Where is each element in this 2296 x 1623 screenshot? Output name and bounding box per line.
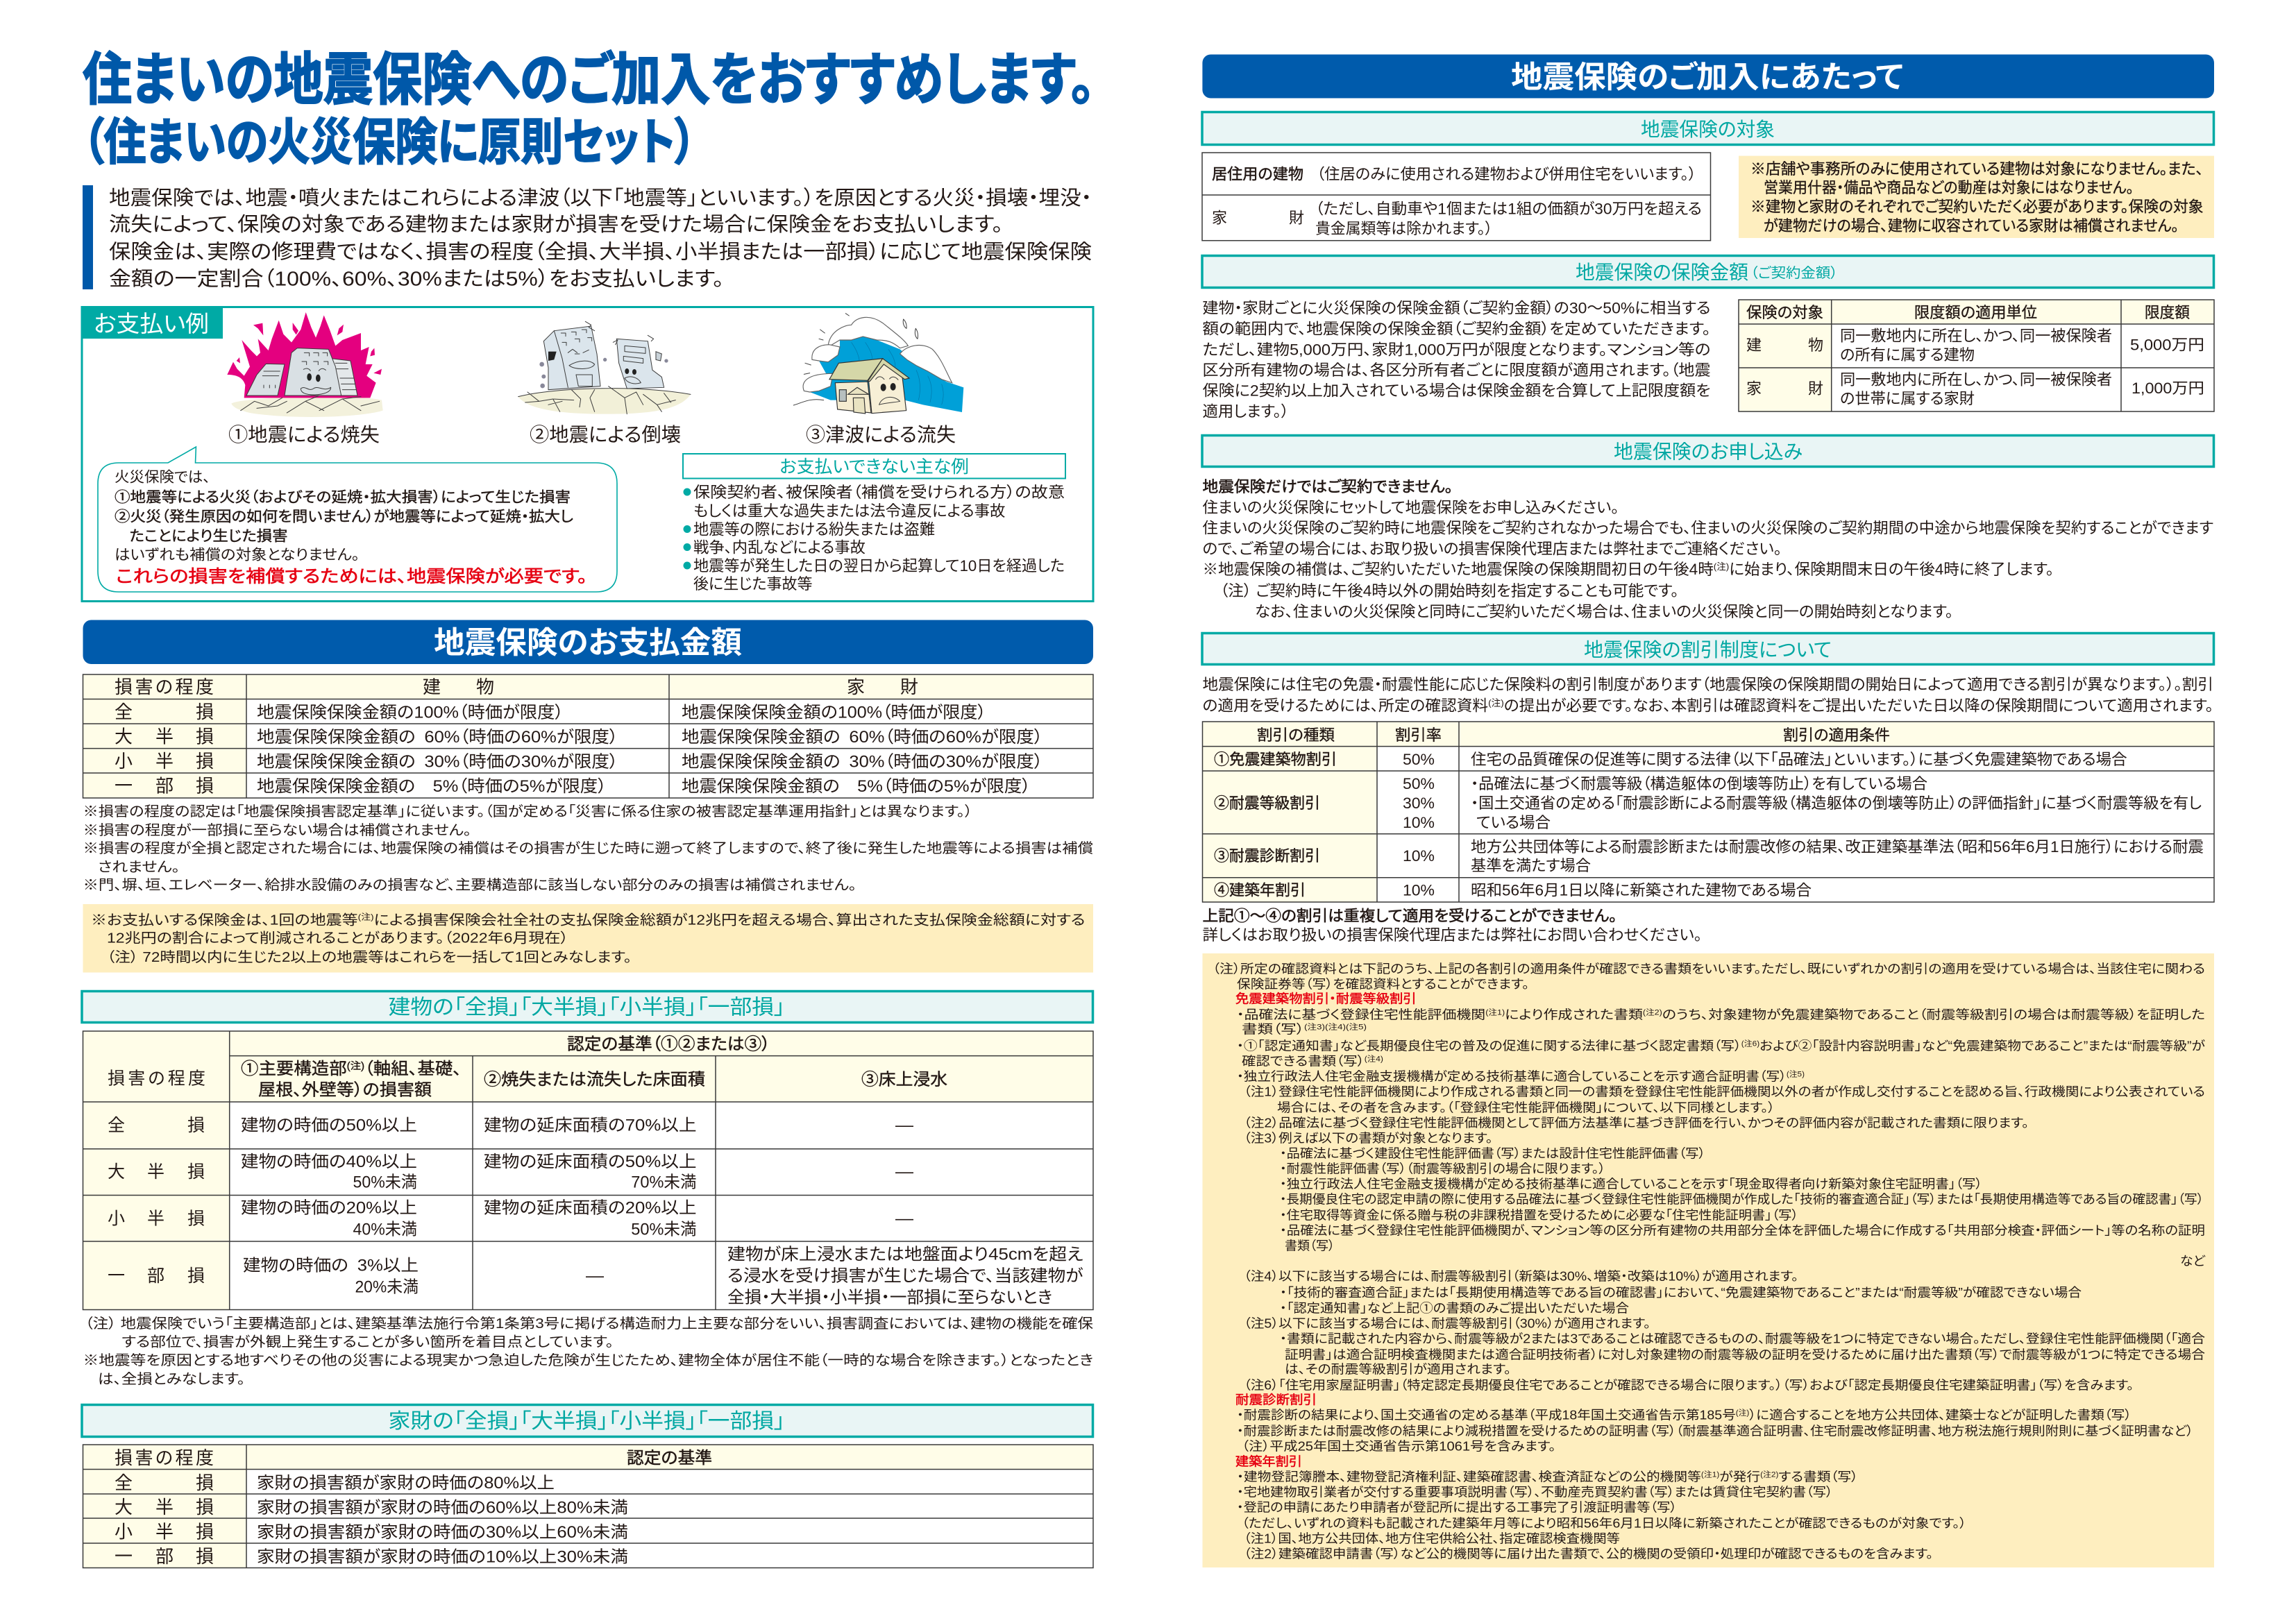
heading: building damage levels	[82, 991, 1092, 1023]
text block: insured amount: 額の範囲内で、地震保険の保険金額（ご契約金額）を定めていただきます。	[1202, 321, 1710, 337]
table: building damage criteria: 建物の延床面積の70%以上	[484, 1116, 697, 1135]
icon: building burning in earthquake	[227, 312, 383, 417]
table: payment amounts	[83, 674, 1093, 798]
table: building damage criteria: 全損・大半損・小半損・一部損に至らないとき	[727, 1288, 1052, 1307]
section: seismic diagnosis: ）に適合することを地方公共団体、建築士などが証明した書類（写）	[1749, 1409, 2132, 1422]
text block: application: 住まいの火災保険にセットして地震保険をお申し込みください。	[1202, 499, 1619, 516]
text block: discount system	[1202, 676, 2213, 715]
intro text block: 流失によって、保険の対象である建物または家財が損害を受けた場合に保険金をお支払いします。	[109, 213, 1003, 236]
table: discounts: ・品確法に基づく耐震等級（構造躯体の倒壊等防止）を有している場合	[1471, 775, 1927, 792]
table: limits: 保険の対象	[1746, 304, 1823, 321]
table: discounts: 地方公共団体等による耐震診断または耐震改修の結果、改正建築基準法（昭和56年6月1日施行）における耐震	[1471, 838, 2204, 856]
section: seismic isolation and resistance grade: ・「技術的審査適合証」または「長期使用構造等である旨の確認書」において、“免震建築物であること”または“耐震等級”が確認できない場合	[1280, 1286, 2082, 1300]
table: building damage criteria: 建物の延床面積の20%以上	[484, 1199, 697, 1217]
table: payment amounts: 地震保険保険金額の 5%（時価の5%が限度）	[682, 777, 1031, 796]
table: building damage criteria: 70%未満	[623, 1173, 697, 1192]
callout: fire insurance does not cover: これらの損害を補償するためには、地震保険が必要です。	[116, 567, 587, 586]
table: building damage criteria: 建物の時価の40%以上	[241, 1153, 417, 1171]
text block: application: (注)	[1714, 561, 1729, 572]
table: limits: 1,000万円	[2132, 380, 2204, 397]
panel: confirmation documents notes	[1202, 953, 2214, 1567]
table: household goods criteria: 家財の損害額が家財の時価の30%以上60%未満	[257, 1523, 628, 1542]
table: building damage criteria: 20%未満	[347, 1278, 419, 1296]
section: seismic isolation and resistance grade: 書類（写）	[1242, 1023, 1292, 1037]
callout: total payment limit: (注)	[358, 912, 374, 921]
note: confirmation documents overview: 保険証券等（写）を確認資料とすることができます。	[1237, 977, 1529, 991]
table: building damage criteria: 50%未満	[345, 1173, 417, 1192]
notes: damage assessment	[83, 804, 1093, 893]
table: household goods criteria	[83, 1445, 1093, 1568]
heading: coverage target: 地震保険の対象	[1641, 119, 1775, 140]
table: building damage criteria: 40%未満	[345, 1220, 417, 1239]
table: payment amounts: 大半損	[115, 726, 214, 747]
table: household goods criteria: 家財の損害額が家財の時価の10%以上30%未満	[257, 1547, 628, 1567]
text block: no overlapping discounts: 詳しくはお取り扱いの損害保険代理店または弊社にお問い合わせください。	[1202, 926, 1702, 944]
heading: earthquake insurance payment amount	[83, 620, 1093, 664]
section: seismic diagnosis: (注)	[1736, 1409, 1749, 1417]
section: seismic isolation and resistance grade: (注1)	[1485, 1008, 1505, 1017]
title	[83, 49, 1095, 171]
table: discounts: ④建築年割引	[1214, 881, 1306, 899]
table: household goods criteria: 大半損	[115, 1497, 214, 1518]
section: construction year: (注1)	[1701, 1470, 1719, 1479]
table: discounts: 50%	[1403, 775, 1435, 792]
table: household goods criteria: 家財の損害額が家財の時価の60%以上80%未満	[257, 1499, 628, 1517]
callout: fire insurance does not cover: ①地震等による火災（およびその延焼・拡大損害）によって生じた損害	[115, 490, 571, 505]
table: payment amounts: 地震保険保険金額の 30%（時価の30%が限度）	[682, 752, 1043, 772]
title: （住まいの火災保険に原則セット）	[83, 115, 696, 171]
sub-panel: cases not paid: 後に生じた事故等	[693, 575, 812, 593]
section: seismic isolation and resistance grade: (注2)	[1643, 1008, 1662, 1017]
section: seismic isolation and resistance grade: （注5）以下に該当する場合には、耐震等級割引（30%）が適用されます。	[1244, 1317, 1651, 1331]
section: seismic isolation and resistance grade: ・住宅取得等資金に係る贈与税の非課税措置を受けるために必要な「住宅性能証明書」（写）	[1280, 1209, 1798, 1223]
label: tsunami: ③津波による流失	[806, 424, 956, 445]
table: building damage criteria: 損害の程度	[108, 1069, 205, 1088]
text block: insured amount	[1202, 300, 1710, 420]
table: covered property: 居住用の建物	[1212, 165, 1303, 183]
section: seismic isolation and resistance grade: （注3）例えば以下の書類が対象となります。	[1244, 1131, 1493, 1145]
table: payment amounts: 損害の程度	[115, 677, 214, 697]
heading: on taking out earthquake insurance	[1202, 54, 2214, 99]
intro text block: 地震保険では、地震・噴火またはこれらによる津波（以下「地震等」といいます。）を原因とする火災・損壊・埋没・	[109, 187, 1092, 210]
intro text block: 金額の一定割合（100%、60%、30%または5%）をお支払いします。	[109, 268, 724, 290]
section: seismic isolation and resistance grade: （注6）「住宅用家屋証明書」（特定認定長期優良住宅であることが確認できる場合に限ります。）（写）および「認定長期優良住宅建築証明書」（写）を含みます。	[1244, 1378, 2134, 1392]
notes: main structural parts: ※地震等を原因とする地すべりその他の災害による現実かつ急迫した危険が生じたため、建物全体が居住不能（一時的な場合を除きます。）となったとき	[83, 1352, 1093, 1368]
notes: main structural parts: は、全損とみなします。	[98, 1371, 245, 1387]
table: building damage criteria: 全損	[108, 1116, 205, 1135]
table: household goods criteria: 小半損	[115, 1521, 214, 1542]
callout: total payment limit: （注） 72時間以内に生じた2以上の地震等はこれらを一括して1回とみなします。	[107, 949, 632, 965]
heading: insured amount: （ご契約金額）	[1750, 265, 1838, 281]
table: payment amounts: 建物	[423, 677, 494, 697]
heading: household goods damage levels	[82, 1404, 1092, 1436]
table: discounts: 基準を満たす場合	[1471, 857, 1591, 874]
section: seismic isolation and resistance grade: ・品確法に基づく建設住宅性能評価書（写）または設計住宅性能評価書（写）	[1280, 1146, 1705, 1160]
text block: application: なお、住まいの火災保険と同時にご契約いただく場合は、住まいの火災保険と同一の開始時刻となります。	[1255, 603, 1953, 620]
table: building damage criteria: る浸水を受け損害が生じた場合で、当該建物が	[727, 1267, 1083, 1285]
notes: damage assessment: ※損害の程度が全損と認定された場合には、地震保険の補償はその損害が生じた時に遡って終了しますので、終了後に発生した地震等による損害は補償	[83, 840, 1093, 856]
table: building damage criteria: 一部損	[108, 1266, 205, 1286]
sub-panel: cases not paid: もしくは重大な過失または法令違反による事故	[693, 502, 1005, 520]
table: discounts: 昭和56年6月1日以降に新築された建物である場合	[1471, 881, 1812, 899]
section: seismic isolation and resistance grade: および②「設計内容説明書」など“免震建築物であること”または“耐震等級”が	[1759, 1039, 2205, 1053]
table: covered property	[1202, 153, 1710, 241]
table: building damage criteria: 大半損	[108, 1162, 205, 1182]
section: construction year: （注1）国、地方公共団体、地方住宅供給公社、指定確認検査機関等	[1244, 1532, 1620, 1546]
sub-panel: cases not paid: 保険契約者、被保険者（補償を受けられる方）の故意	[693, 484, 1065, 501]
sub-panel: cases not paid	[683, 454, 1065, 593]
table: discounts: 10%	[1403, 881, 1435, 899]
callout: total payment limit: 12兆円の割合によって削減されることがあります。（2022年6月現在）	[107, 930, 568, 946]
notes: main structural parts: する部位で、損害が外観上発生することが多い箇所を着目点としています。	[121, 1334, 614, 1350]
table: payment amounts: 地震保険保険金額の100%（時価が限度）	[257, 704, 564, 722]
section: seismic isolation and resistance grade: （注2）品確法に基づく登録住宅性能評価機関として評価方法基準に基づき評価を行い、かつその評価内容が記載された書類に限ります。	[1244, 1116, 2029, 1130]
table: covered property: （ただし、自動車や1個または1組の価額が30万円を超える	[1315, 200, 1702, 218]
section: seismic isolation and resistance grade: (注6)	[1741, 1039, 1759, 1048]
table: discounts: 住宅の品質確保の促進等に関する法律（以下「品確法」といいます。）に基づく免震建築物である場合	[1471, 751, 2127, 768]
section: seismic isolation and resistance grade: 書類（写）	[1285, 1239, 1335, 1253]
table: discounts: ②耐震等級割引	[1214, 794, 1320, 812]
text block: discount system: (注)	[1488, 698, 1504, 708]
section: construction year: （ただし、いずれの資料も記載された建築年月等により昭和56年6月1日以降に新築されたことが確認できるものが対象です。）	[1242, 1517, 1966, 1531]
table: discounts: 10%	[1403, 847, 1435, 865]
table: building damage criteria: ―	[895, 1163, 913, 1181]
section: seismic isolation and resistance grade: など	[2180, 1255, 2206, 1268]
text block: no overlapping discounts	[1202, 908, 1702, 944]
heading: insured amount: 地震保険の保険金額	[1576, 262, 1748, 283]
table: household goods criteria: 損害の程度	[115, 1447, 214, 1468]
text block: application: （注） ご契約時に午後4時以外の開始時刻を指定することも可能です。	[1220, 582, 1679, 600]
table: limits: の世帯に属する家財	[1840, 390, 1975, 407]
section: seismic isolation and resistance grade	[1235, 992, 2206, 1392]
text block: application: に始まり、保険期間末日の午後4時に終了します。	[1729, 561, 2054, 578]
heading: insured amount	[1202, 255, 2214, 287]
heading: coverage target	[1202, 112, 2214, 144]
tab heading: payment examples: お支払い例	[94, 311, 209, 337]
section: construction year: ・宅地建物取引業者が交付する重要事項説明書（写）、不動産売買契約書（写）または賃貸住宅契約書（写）	[1237, 1485, 1833, 1499]
section: construction year: 建築年割引	[1235, 1454, 1302, 1468]
table: building damage criteria: ②焼失または流失した床面積	[484, 1070, 705, 1089]
table: building damage criteria: 建物の時価の20%以上	[241, 1199, 417, 1217]
heading: earthquake insurance payment amount: 地震保険のお支払金額	[434, 626, 742, 660]
section: construction year: が発行	[1719, 1470, 1760, 1484]
table: payment amounts: 地震保険保険金額の 30%（時価の30%が限度）	[257, 752, 618, 772]
notes: main structural parts	[83, 1316, 1093, 1387]
section: seismic isolation and resistance grade: ・品確法に基づく登録住宅性能評価機関	[1237, 1008, 1451, 1021]
section: seismic isolation and resistance grade: (注4)	[1365, 1055, 1383, 1063]
heading: application	[1202, 436, 2214, 466]
table: building damage criteria: 建物が床上浸水または地盤面より45cmを超え	[727, 1245, 1083, 1264]
text block: application	[1202, 478, 2213, 620]
intro text block	[83, 185, 1092, 290]
section: seismic isolation and resistance grade: ・書類に記載された内容から、耐震等級が2または3であることは確認できるものの、耐震等級を1つに特定できない場合。ただし、登録住宅性能評価機関（「適合	[1280, 1332, 2205, 1346]
table: limits: 同一敷地内に所在し、かつ、同一被保険者	[1840, 371, 2112, 389]
table: building damage criteria: 建物の時価の50%以上	[241, 1116, 417, 1135]
section: seismic diagnosis	[1235, 1393, 2193, 1453]
callout: coverage notes: 営業用什器・備品や商品などの動産は対象にはなりません。	[1764, 179, 2134, 196]
notes: damage assessment: ※損害の程度の認定は「地震保険損害認定基準」に従います。（国が定める「災害に係る住家の被害認定基準運用指針」とは異なります。）	[83, 804, 972, 819]
notes: damage assessment: されません。	[98, 860, 180, 875]
section: seismic isolation and resistance grade: 場合には、その者を含みます。（「登録住宅性能評価機関」について、以下同様とします。）	[1277, 1101, 1775, 1114]
section: seismic isolation and resistance grade: 確認できる書類（写）	[1242, 1055, 1350, 1069]
sub-panel: cases not paid: 地震等の際における紛失または盗難	[693, 520, 935, 538]
table: discounts: ・国土交通省の定める「耐震診断による耐震等級（構造躯体の倒壊等防止）の評価指針」に基づく耐震等級を有し	[1471, 794, 2202, 812]
table: discounts	[1202, 722, 2214, 902]
section: seismic isolation and resistance grade: ・長期優良住宅の認定申請の際に使用する品確法に基づく登録住宅性能評価機関が作成した「技術的審査適合証」（写）または「長期使用構造等である旨の確認書」（写）	[1280, 1192, 2204, 1206]
callout: fire insurance does not cover	[98, 447, 617, 592]
callout: fire insurance does not cover: はいずれも補償の対象となりません。	[115, 547, 360, 563]
section: seismic diagnosis: （注）平成25年国土交通省告示第1061号を含みます。	[1242, 1439, 1556, 1453]
section: construction year: (注2)	[1760, 1470, 1778, 1479]
section: construction year	[1235, 1454, 1966, 1561]
icon: collapsed buildings	[518, 321, 691, 414]
section: seismic isolation and resistance grade: ・独立行政法人住宅金融支援機構が定める技術基準に適合していることを示す適合証明書（写）	[1237, 1070, 1743, 1084]
section: seismic isolation and resistance grade: （注4）以下に該当する場合には、耐震等級割引（新築は30%、増築・改築は10%）が適用されます。	[1244, 1270, 1798, 1284]
table: discounts: ①免震建築物割引	[1214, 751, 1337, 768]
table: discounts: 10%	[1403, 814, 1435, 831]
text block: insured amount: 区分所有建物の場合は、各区分所有者ごとに限度額が適用されます。（地震	[1202, 362, 1710, 379]
label: fire: ①地震による焼失	[228, 424, 380, 445]
callout: coverage notes: ※店舗や事務所のみに使用されている建物は対象になりません。また、	[1750, 160, 2203, 178]
heading: on taking out earthquake insurance: 地震保険のご加入にあたって	[1511, 60, 1903, 94]
table: discounts: 割引率	[1395, 726, 1442, 744]
table: building damage criteria: 建物の延床面積の50%以上	[484, 1153, 697, 1171]
callout: fire insurance does not cover: たことにより生じた損害	[129, 529, 287, 544]
callout: fire insurance does not cover: 火災保険では、	[115, 469, 210, 486]
section: seismic isolation and resistance grade: (注3)(注4)(注5)	[1304, 1023, 1367, 1031]
table: household goods criteria: 家財の損害額が家財の時価の80%以上	[257, 1474, 555, 1493]
table: building damage criteria: (注)	[347, 1060, 364, 1072]
table: limits: 5,000万円	[2130, 336, 2204, 354]
table: discounts: 割引の種類	[1257, 726, 1335, 744]
table: building damage criteria: ③床上浸水	[861, 1070, 947, 1089]
sub-panel: cases not paid: お支払いできない主な例	[779, 457, 969, 477]
heading: discount system	[1202, 633, 2214, 665]
section: seismic diagnosis: ・耐震診断または耐震改修の結果により減税措置を受けるための証明書（写）（耐震基準適合証明書、住宅耐震改修証明書、地方税法施行規則附則に基づく証明書など）	[1237, 1424, 2193, 1438]
heading: application: 地震保険のお申し込み	[1614, 441, 1803, 462]
text block: application: ※地震保険の補償は、ご契約いただいた地震保険の保険期間初日の午後4時	[1202, 561, 1701, 578]
table: building damage criteria: ①主要構造部	[241, 1060, 341, 1078]
text block: discount system: 地震保険には住宅の免震・耐震性能に応じた保険料の割引制度があります（地震保険の保険期間の開始日によって適用できる割引が異なります。）。割引	[1202, 676, 2213, 693]
section: seismic isolation and resistance grade: 証明書」は適合証明検査機関または適合証明技術者）に対し対象建物の耐震等級の証明を受けるために届け出た書類（写）で耐震等級が1つに特定できる場合	[1285, 1348, 2205, 1361]
callout: total payment limit: による損害保険会社全社の支払保険金総額が12兆円を超える場合、算出された支払保険金総額に対する	[374, 912, 1086, 928]
table: household goods criteria: 全損	[115, 1472, 214, 1493]
table: discounts: ている場合	[1476, 814, 1551, 831]
label: collapse: ②地震による倒壊	[530, 424, 681, 445]
table: building damage criteria: ―	[895, 1209, 913, 1228]
table: building damage criteria: 建物の時価の 3%以上	[243, 1256, 419, 1275]
section: construction year: ・建物登記簿謄本、建物登記済権利証、建築確認書、検査済証などの公的機関等	[1237, 1470, 1660, 1484]
text block: application: 地震保険だけではご契約できません。	[1202, 478, 1453, 495]
section: seismic isolation and resistance grade: ・独立行政法人住宅金融支援機構が定める技術基準に適合していることを示す「現金取得者向け新築対象住宅証明書」（写）	[1280, 1177, 1982, 1191]
table: covered property: 家財	[1212, 210, 1304, 226]
table: limits: 建物	[1746, 337, 1823, 354]
table: building damage criteria: 屋根、外壁等）の損害額	[258, 1081, 432, 1099]
sub-panel: cases not paid: 戦争、内乱などによる事故	[693, 538, 866, 556]
heading: household goods damage levels: 家財の「全損」「大半損」「小半損」「一部損」	[389, 1410, 785, 1433]
note: confirmation documents overview	[1213, 962, 2205, 991]
table: building damage criteria	[83, 1031, 1093, 1310]
table: discounts: ③耐震診断割引	[1214, 847, 1320, 865]
table: payment amounts: 全損	[115, 702, 214, 722]
table: payment amounts: 地震保険保険金額の 60%（時価の60%が限度）	[682, 728, 1043, 747]
table: building damage criteria: ―	[586, 1267, 604, 1285]
table: building damage criteria: 認定の基準（①②または③）	[567, 1035, 770, 1053]
table: payment amounts: 一部損	[115, 776, 214, 797]
callout: coverage notes: が建物だけの場合、建物に収容されている家財は補償されません。	[1764, 217, 2179, 235]
icon: house in tsunami	[793, 314, 963, 414]
section: seismic diagnosis: 耐震診断割引	[1235, 1393, 1317, 1407]
section: construction year: （注2）建築確認申請書（写）など公的機関等に届け出た書類で、公的機関の受領印・処理印が確認できるものを含みます。	[1244, 1547, 1933, 1561]
table: covered property: 貴金属類等は除かれます。）	[1315, 220, 1493, 237]
text block: insured amount: 建物・家財ごとに火災保険の保険金額（ご契約金額）の30～50%に相当する	[1202, 300, 1710, 316]
table: building damage criteria: 50%未満	[623, 1220, 697, 1239]
table: discounts: 割引の適用条件	[1783, 726, 1890, 744]
table: payment amounts: 小半損	[115, 751, 214, 772]
table: building damage criteria: ―	[895, 1116, 913, 1135]
callout: total payment limit	[83, 904, 1093, 973]
section: construction year: ・登記の申請にあたり申請者が登記所に提出する工事完了引渡証明書等（写）	[1237, 1500, 1677, 1514]
table: household goods criteria: 一部損	[115, 1546, 214, 1567]
text block: insured amount: 保険に2契約以上加入されている場合は保険金額を合算して上記限度額を	[1202, 382, 1710, 400]
table: limits: の所有に属する建物	[1840, 346, 1975, 364]
notes: damage assessment: ※門、塀、垣、エレベーター、給排水設備のみの損害など、主要構造部に該当しない部分のみの損害は補償されません。	[83, 877, 856, 893]
section: seismic isolation and resistance grade: のうち、対象建物が免震建築物であること（耐震等級割引の場合は耐震等級）を証明した	[1662, 1008, 2205, 1021]
section: seismic isolation and resistance grade: （注1）登録住宅性能評価機関により作成される書類と同一の書類を登録住宅性能評価機関以外の者が作成し交付することを認める旨、行政機関により公表されている	[1244, 1085, 2205, 1099]
table: limits: 同一敷地内に所在し、かつ、同一被保険者	[1840, 328, 2112, 344]
section: seismic isolation and resistance grade: ・「認定通知書」など上記①の書類のみご提出いただいた場合	[1280, 1302, 1629, 1316]
title: 住まいの地震保険へのご加入をおすすめします。	[83, 49, 1095, 112]
heading: discount system: 地震保険の割引制度について	[1584, 639, 1832, 661]
table: limits: 家財	[1746, 380, 1823, 397]
intro text block: 保険金は、実際の修理費ではなく、損害の程度（全損、大半損、小半損または一部損）に応じて地震保険保険	[109, 240, 1092, 264]
text block: insured amount: 適用します。）	[1202, 402, 1289, 420]
text block: insured amount: ただし、建物5,000万円、家財1,000万円が限度となります。マンション等の	[1202, 341, 1710, 358]
table: limits: 限度額	[2145, 304, 2190, 321]
sub-panel: cases not paid: 地震等が発生した日の翌日から起算して10日を経過した	[693, 557, 1065, 575]
section: seismic isolation and resistance grade: (注5)	[1787, 1070, 1805, 1078]
section: seismic isolation and resistance grade: 免震建築物割引・耐震等級割引	[1235, 992, 1417, 1006]
table: household goods criteria: 認定の基準	[627, 1449, 712, 1468]
section: seismic isolation and resistance grade: は、その耐震等級割引が適用されます。	[1285, 1363, 1511, 1377]
text block: application: ので、ご希望の場合には、お取り扱いの損害保険代理店または弊社までご連絡ください。	[1202, 540, 1782, 558]
panel: payment examples	[81, 306, 1093, 601]
section: seismic isolation and resistance grade: により作成された書類	[1505, 1008, 1643, 1021]
heading: building damage levels: 建物の「全損」「大半損」「小半損」「一部損」	[389, 996, 785, 1019]
notes: damage assessment: ※損害の程度が一部損に至らない場合は補償されません。	[83, 822, 471, 838]
table: limits: 限度額の適用単位	[1914, 304, 2037, 321]
notes: main structural parts: （注） 地震保険でいう「主要構造部」とは、建築基準法施行令第1条第3号に掲げる構造耐力上主要な部分をいい、損害調査においては、建物の機能を確保	[85, 1316, 1093, 1332]
text block: no overlapping discounts: 上記①～④の割引は重複して適用を受けることができません。	[1202, 908, 1617, 924]
table: payment amounts: 地震保険保険金額の100%（時価が限度）	[682, 704, 986, 722]
section: construction year: する書類（写）	[1778, 1470, 1858, 1484]
table: payment amounts: 地震保険保険金額の 60%（時価の60%が限度）	[257, 728, 618, 747]
note: confirmation documents overview: （注）所定の確認資料とは下記のうち、上記の各割引の適用条件が確認できる書類をいいます。ただし、既にいずれかの割引の適用を受けている場合は、当該住宅に関わる	[1213, 962, 2205, 976]
section: seismic isolation and resistance grade: ・品確法に基づく登録住宅性能評価機関が、マンション等の区分所有建物の共用部分全体を評価した場合に作成する「共用部分検査・評価シート」等の名称の証明	[1280, 1224, 2205, 1238]
table: building damage criteria: （軸組、基礎、	[364, 1060, 462, 1078]
section: seismic isolation and resistance grade: ・①「認定通知書」など長期優良住宅の普及の促進に関する法律に基づく認定書類（写）	[1237, 1039, 1696, 1053]
table: discounts: 50%	[1403, 751, 1435, 768]
table: payment amounts: 地震保険保険金額の 5%（時価の5%が限度）	[257, 777, 607, 796]
text block: discount system: の適用を受けるためには、所定の確認資料	[1202, 697, 1480, 715]
tab heading: payment examples	[81, 306, 223, 339]
table: limits	[1739, 300, 2214, 411]
text block: application: 住まいの火災保険のご契約時に地震保険をご契約されなかった場合でも、住まいの火災保険のご契約期間の中途から地震保険を契約することができます	[1202, 519, 2213, 537]
callout: total payment limit: ※お支払いする保険金は、1回の地震等	[91, 913, 323, 928]
table: payment amounts: 家財	[847, 677, 918, 697]
table: discounts: 30%	[1403, 794, 1435, 812]
table: building damage criteria: 小半損	[108, 1209, 205, 1228]
text block: discount system: の提出が必要です。なお、本割引は確認資料をご提出いただいた日以降の保険期間について適用されます。	[1504, 697, 2213, 715]
callout: coverage notes: ※建物と家財のそれぞれでご契約いただく必要があります。保険の対象	[1750, 198, 2203, 215]
table: covered property: （住居のみに使用される建物および併用住宅をいいます。）	[1317, 165, 1696, 183]
section: seismic isolation and resistance grade: ・耐震性能評価書（写）（耐震等級割引の場合に限ります。）	[1280, 1162, 1605, 1175]
callout: fire insurance does not cover: ②火災（発生原因の如何を問いません）が地震等によって延焼・拡大し	[115, 509, 573, 525]
section: seismic diagnosis: ・耐震診断の結果により、国土交通省の定める基準（平成18年国土交通省告示第185号	[1237, 1409, 1696, 1422]
callout: coverage notes	[1739, 156, 2214, 238]
